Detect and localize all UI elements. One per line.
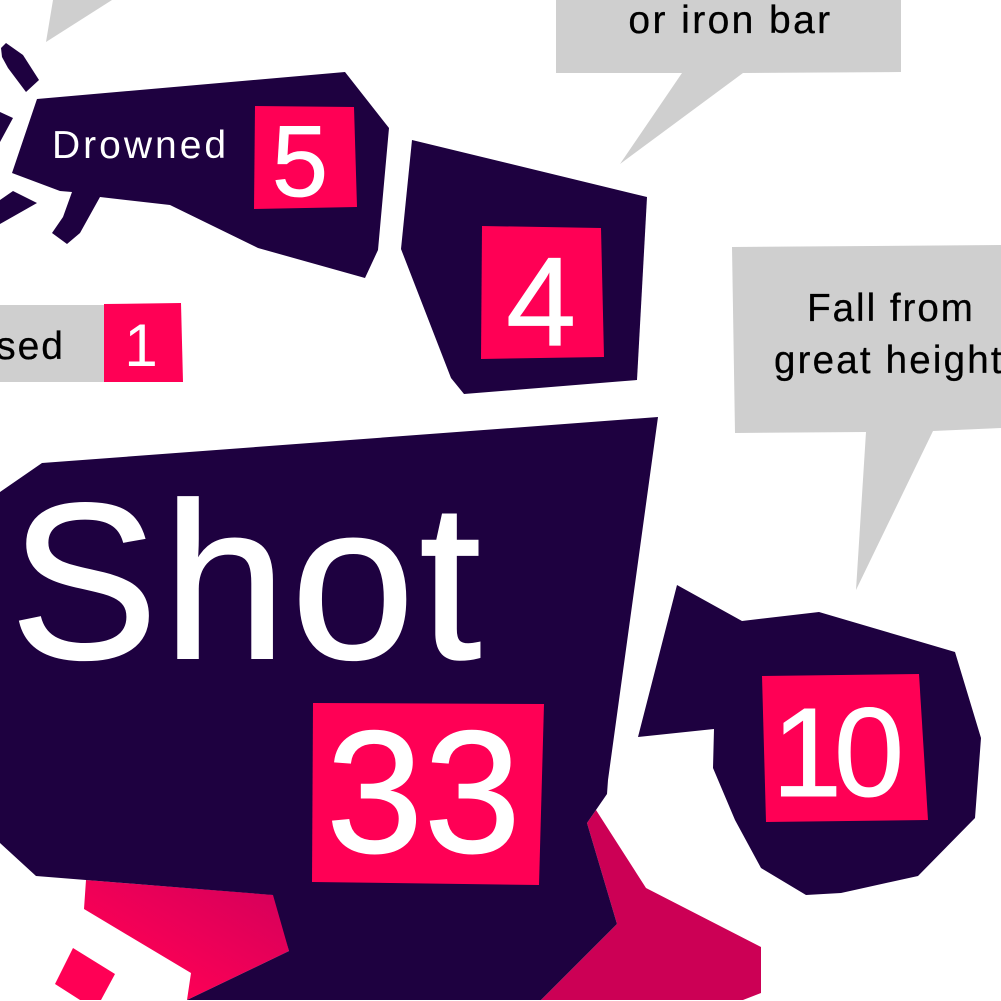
panel: shot: Shot	[10, 458, 486, 706]
panel: fall count	[638, 585, 981, 895]
panel: iron bar count	[401, 140, 647, 394]
panel: drowned: Drowned	[52, 124, 229, 167]
panel: shot: 33	[326, 694, 522, 889]
panel: fall count: 10	[772, 682, 900, 823]
panel: drowned	[12, 72, 389, 278]
panel: shot	[0, 417, 658, 1000]
icon: burst fragments	[0, 43, 39, 224]
icon: left pink shape	[84, 880, 289, 1000]
callout: fall from great height: great height	[774, 339, 1001, 382]
panel: drowned: 5	[272, 106, 328, 218]
icon: speech bubble tail top left	[46, 0, 112, 42]
callout: or iron bar	[556, 0, 901, 164]
panel: iron bar count: 4	[506, 231, 576, 372]
icon: right crimson shape	[541, 810, 761, 1000]
callout: or iron bar: or iron bar	[628, 0, 833, 42]
callout: fall from great height: Fall from	[807, 287, 975, 330]
callout: fall from great height	[732, 245, 1001, 590]
icon: pink diamond	[55, 948, 115, 1000]
panel: poisoned count: 1	[124, 312, 158, 379]
panel: poisoned count	[0, 303, 183, 382]
